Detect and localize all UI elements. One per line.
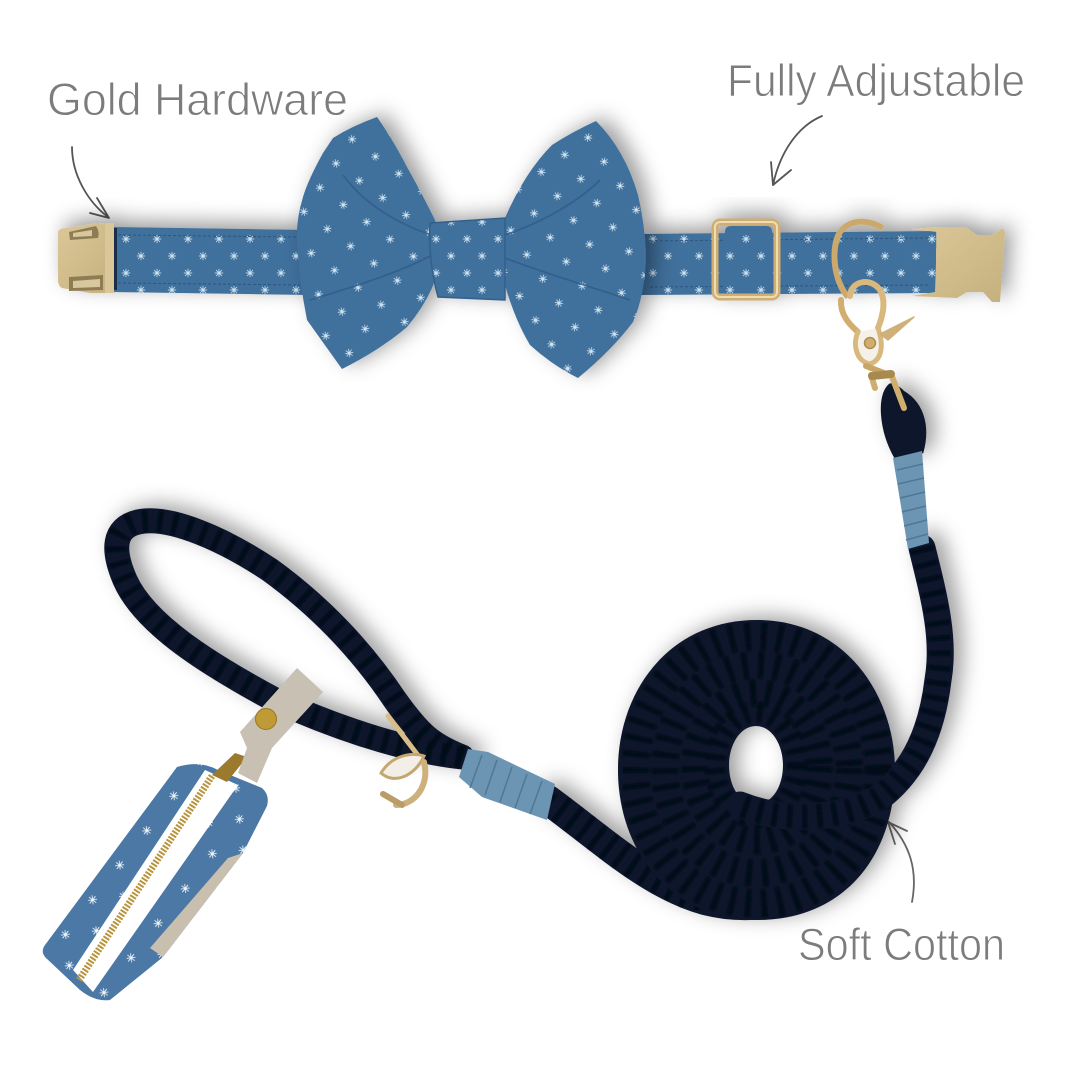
bow folds bbox=[310, 175, 630, 300]
bow tie bbox=[297, 117, 646, 378]
arrow: to adjuster bbox=[771, 116, 822, 185]
zipper teeth bbox=[79, 776, 212, 980]
leather strap bbox=[238, 668, 323, 783]
label: Soft Cotton: Soft Cotton bbox=[798, 919, 1005, 970]
upper rope bbox=[740, 548, 940, 817]
left buckle bbox=[58, 223, 117, 293]
zipper pull bbox=[212, 753, 247, 782]
rope loop at clip bbox=[882, 385, 925, 458]
rope wrap: lower light blue bbox=[459, 749, 555, 820]
right wing bbox=[495, 121, 646, 378]
collar band left bbox=[113, 227, 310, 295]
hand loop bbox=[117, 521, 462, 757]
pouch body bbox=[43, 764, 268, 1000]
arrow: to cotton rope bbox=[888, 822, 914, 902]
collar bbox=[58, 222, 1005, 302]
arrow: to gold buckle bbox=[72, 147, 109, 218]
rope wrap: upper light blue bbox=[893, 451, 929, 549]
label: Fully Adjustable: Fully Adjustable bbox=[727, 55, 1025, 106]
main rope to coil bbox=[548, 800, 790, 905]
charm on leash bbox=[381, 716, 425, 805]
coil bbox=[618, 620, 895, 920]
label: Gold Hardware: Gold Hardware bbox=[47, 74, 348, 125]
zipper tape bbox=[73, 770, 238, 992]
collar band right bbox=[640, 231, 936, 295]
rivet bbox=[256, 708, 276, 730]
leash bbox=[117, 385, 940, 920]
D ring bbox=[834, 222, 883, 297]
slider buckle bbox=[715, 222, 777, 297]
swivel clip bbox=[841, 282, 914, 408]
right buckle bbox=[912, 227, 1005, 302]
knot bbox=[430, 218, 505, 300]
poop bag pouch bbox=[43, 668, 323, 1000]
left wing bbox=[297, 117, 445, 369]
pouch label bbox=[150, 853, 243, 957]
